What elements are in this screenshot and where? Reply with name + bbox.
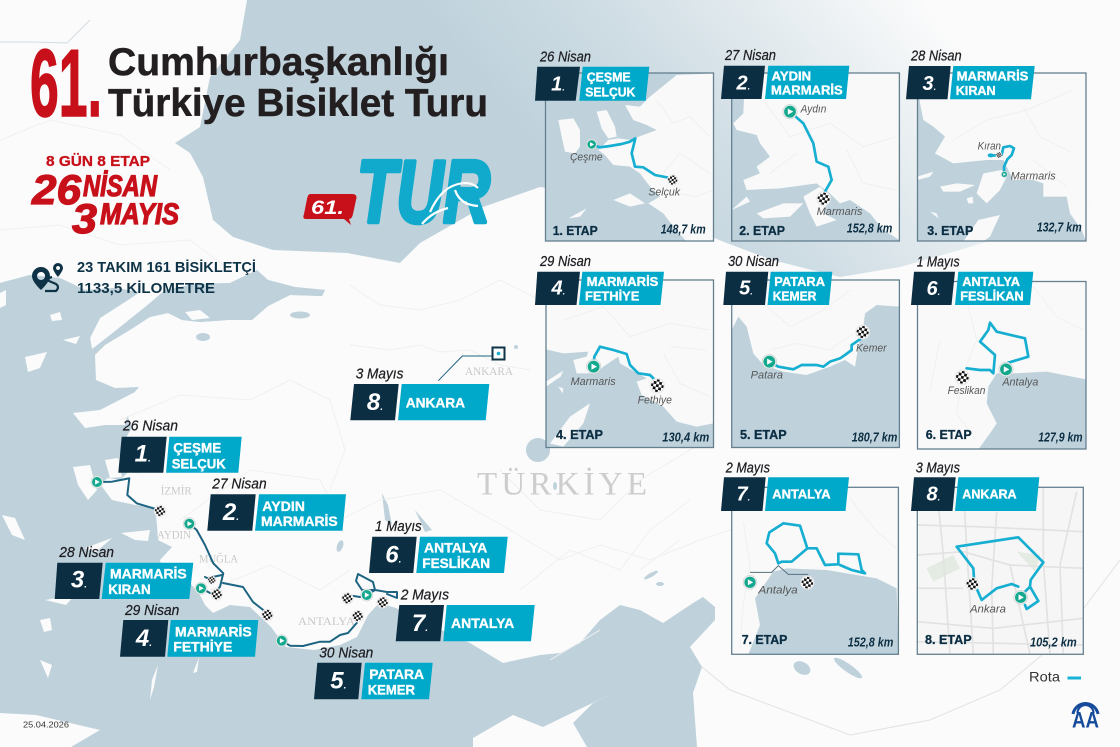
date block: 8 days, 26 April - 3 May: 8 GÜN 8 ETAP (46, 153, 150, 170)
date block: 8 days, 26 April - 3 May: NİSAN (83, 170, 158, 203)
province labels on map: İZMİR (161, 483, 192, 497)
overview label 1 (118, 419, 242, 473)
overview label 1: ÇEŞME (173, 440, 221, 456)
panel: stage 7: ANTALYA (772, 487, 831, 501)
overview label 2 (207, 477, 346, 531)
panel: stage 6: 1 Mayıs (917, 255, 960, 271)
logo: 61. TUR (303, 142, 490, 241)
overview label 5: 5. (330, 667, 346, 694)
panel: stage 5: Kemer (856, 343, 888, 355)
overview label 6: ANTALYA (424, 540, 487, 556)
panel: stage 4: Fethiye (638, 394, 672, 406)
panel: stage 5: 30 Nisan (728, 254, 779, 270)
icon: route pins (32, 263, 63, 291)
overview label 3: MARMARİS (110, 566, 187, 582)
panel: stage 8: 8. (926, 484, 940, 506)
panel: stage 1: 1. ETAP (553, 223, 598, 238)
panel: stage 3: 28 Nisan (910, 49, 962, 65)
date block: 8 days, 26 April - 3 May: 26 (31, 166, 82, 213)
overview label 4: FETHİYE (173, 639, 232, 655)
panel: stage 7: 152,8 km (848, 636, 893, 650)
panel: stage 5: 5. (739, 277, 753, 299)
overview label 5 (314, 645, 433, 699)
panel: stage 3: 3. ETAP (927, 223, 974, 238)
panel: stage 2: MARMARİS (771, 82, 843, 97)
panel: stage 6: 6. (926, 278, 940, 300)
overview label 7: 2 Mayıs (400, 587, 449, 603)
overview label 1: 1. (135, 441, 151, 468)
overview label 5: PATARA (369, 666, 424, 682)
panel: stage 1 (535, 50, 714, 242)
panel: stage 7: 7. ETAP (742, 632, 788, 647)
panel: stage 5: 180,7 km (852, 431, 897, 445)
overview label 7: ANTALYA (451, 615, 514, 631)
overview label 4: 29 Nisan (124, 603, 179, 619)
province labels on map: ANKARA (465, 366, 514, 378)
panel: stage 5: Patara (751, 369, 783, 381)
Ankara locator (438, 348, 504, 381)
panel: stage 5 (723, 254, 899, 448)
panel: stage 4: 29 Nisan (539, 254, 591, 270)
panel: stage 2: AYDIN (772, 70, 811, 84)
panel: stage 8: Ankara (969, 604, 1006, 616)
legend: route: Rota (1029, 669, 1060, 685)
panel: stage 1: 1. (551, 74, 565, 96)
stats text: 23 TAKIM 161 BİSİKLETÇİ (77, 259, 256, 276)
country label: TÜRKİYE (477, 466, 647, 502)
icon: AA logo: AA (1072, 708, 1099, 732)
title: 61.: 61. (30, 30, 102, 137)
overview label 2: 27 Nisan (211, 477, 267, 493)
panel: stage 7 (721, 460, 898, 654)
panel: stage 2: Aydın (800, 103, 826, 115)
overview label 6: 6. (385, 541, 401, 568)
panel: stage 3: 132,7 km (1037, 221, 1082, 235)
overview label 8 (350, 366, 489, 420)
panel: stage 6: Antalya (1001, 377, 1038, 389)
panel: stage 1: 148,7 km (661, 222, 706, 236)
panel: stage 8 (911, 460, 1083, 654)
panel: stage 1: ÇEŞME (587, 71, 631, 85)
overview routes (91, 476, 397, 647)
panel: stage 1: Çeşme (570, 152, 603, 164)
panel: stage 3: KIRAN (956, 84, 996, 98)
overview label 5: KEMER (368, 681, 415, 697)
panel: stage 6: Feslikan (948, 385, 985, 397)
panel: stage 4: MARMARİS (587, 274, 658, 289)
panel: stage 4: FETHİYE (585, 289, 639, 304)
province labels on map (157, 366, 514, 628)
panel: stage 7: Antalya (757, 584, 798, 596)
date stamp: 25.04.2026 (23, 720, 69, 730)
date block: 8 days, 26 April - 3 May: MAYIS (100, 198, 179, 231)
overview label 2: 2. (222, 499, 239, 526)
panel: stage 5: PATARA (774, 275, 825, 289)
panel: stage 3: MARMARİS (957, 69, 1028, 84)
panel: stage 3: Kıran (978, 140, 1001, 152)
panel: stage 2: 152,8 km (847, 221, 892, 235)
overview label 2: MARMARİS (261, 513, 338, 529)
panel: stage 2: 2. (735, 72, 750, 94)
overview label 4: 4. (135, 625, 152, 652)
stats text (77, 259, 256, 297)
panel: stage 3: 3. (922, 73, 936, 95)
province labels on map: MUĞLA (199, 551, 239, 565)
panel: stage 4: 4. ETAP (556, 427, 603, 442)
panel: stage 1: SELÇUK (585, 86, 636, 100)
panel: stage 6: 6. ETAP (926, 427, 972, 442)
panel: stage 6 (911, 255, 1086, 449)
overview label 6: 1 Mayıs (375, 519, 422, 535)
title: tour name (108, 41, 488, 125)
panel: stage 4: Marmaris (571, 376, 616, 388)
overview label 8: 8. (367, 389, 383, 416)
panel: stage 4: 4. (550, 277, 565, 299)
panel: stage 7: 7. (736, 484, 750, 506)
overview label 1: SELÇUK (172, 455, 226, 471)
panel: stage 4: 130,4 km (662, 431, 709, 445)
province labels on map: AYDIN (157, 529, 192, 541)
overview label 3: 3. (71, 567, 87, 594)
panel: stage 2: Marmaris (817, 206, 863, 218)
panel: stage 7: 2 Mayıs (725, 460, 770, 476)
panel: stage 8: 3 Mayıs (916, 460, 960, 476)
overview label 6 (369, 519, 508, 573)
panel: stage 8: 8. ETAP (925, 632, 972, 647)
panel: stage 3 (906, 49, 1086, 241)
overview label 7 (396, 587, 535, 641)
stats text: 1133,5 KİLOMETRE (77, 280, 215, 297)
panel: stage 2: 27 Nisan (724, 48, 776, 64)
panel: stage 2 (721, 48, 899, 241)
panel: stage 6: FESLİKAN (960, 289, 1024, 304)
panel: stage 3: Marmaris (1011, 170, 1056, 182)
panel: stage 2: 2. ETAP (739, 223, 785, 238)
overview label 3: 28 Nisan (58, 545, 114, 561)
overview label 8: 3 Mayıs (356, 366, 403, 382)
overview label 4 (120, 603, 258, 657)
province labels on map: ANTALYA (298, 616, 356, 628)
panel: stage 5: 5. ETAP (740, 427, 787, 442)
overview label 6: FESLİKAN (422, 555, 490, 571)
overview label 1: 26 Nisan (122, 419, 178, 435)
panel: stage 8: ANKARA (962, 487, 1017, 501)
overview label 3: KIRAN (108, 581, 151, 597)
panel: stage 6: ANTALYA (962, 275, 1020, 289)
panel: stage 8: 105,2 km (1030, 636, 1077, 650)
panel: stage 1: Selçuk (648, 186, 680, 198)
title: tour name: Türkiye Bisiklet Turu (108, 82, 488, 125)
date block: 8 days, 26 April - 3 May (31, 153, 179, 242)
overview label 7: 7. (412, 610, 428, 637)
panel: stage 6: 127,9 km (1038, 431, 1083, 445)
panel: stage 5: KEMER (773, 290, 816, 304)
overview label 3 (55, 545, 193, 599)
logo: 61. TUR: TUR (357, 142, 490, 241)
legend: route (1029, 669, 1081, 685)
overview label 4: MARMARİS (175, 624, 252, 640)
title: tour name: Cumhurbaşkanlığı (108, 41, 449, 84)
overview label 2: AYDIN (262, 498, 305, 514)
date block: 8 days, 26 April - 3 May: 3 (72, 195, 97, 242)
logo: 61. TUR: 61. (311, 198, 344, 219)
overview label 8: ANKARA (406, 395, 465, 411)
overview label 5: 30 Nisan (319, 645, 373, 661)
panel: stage 4 (535, 254, 714, 448)
panel: stage 1: 26 Nisan (539, 50, 591, 66)
